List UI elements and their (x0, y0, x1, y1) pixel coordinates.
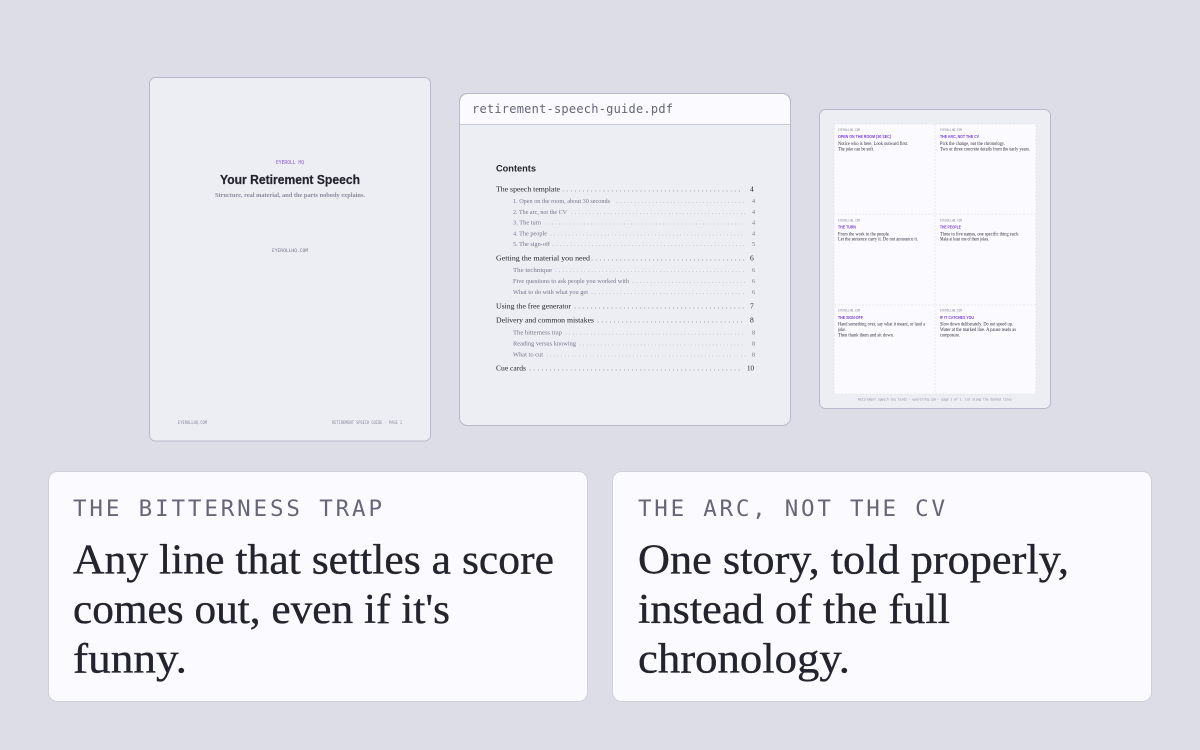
cue card: open on the room: The joke can be soft. (838, 148, 874, 152)
cue card: open on the room (838, 127, 908, 152)
quote text: chronology. (638, 636, 850, 682)
cue card: if it catches you: Slow down deliberately. Do not speed up. (940, 322, 1013, 328)
table of contents: Cue cards (496, 364, 526, 372)
panel: the bitterness trap quote (48, 472, 588, 702)
cue card: open on the room: OPEN ON THE ROOM (30 SEC) (838, 134, 892, 139)
cover website: EYEROLLHQ.COM (272, 248, 308, 254)
table of contents: The technique (513, 267, 552, 274)
cue card: the people: THE PEOPLE (940, 224, 961, 230)
table of contents: 4 (752, 198, 755, 205)
table of contents: 8 (752, 340, 755, 348)
cue cards footer note: Retirement Speech Cue Cards · eyerollhq.com · page 1 of 1. cut along the dashed lines (858, 398, 1012, 402)
cue card: the people (940, 218, 1019, 242)
quote text: Any line that settles a score (73, 538, 554, 584)
cue card: if it catches you: IF IT CATCHES YOU (940, 315, 974, 320)
cue card: the turn: From the work to the people. (838, 232, 890, 238)
table of contents: 1. Open on the room, about 30 seconds (513, 198, 611, 205)
cue card: the turn: THE TURN (838, 224, 856, 230)
table of contents: 2. The arc, not the CV (513, 209, 568, 216)
table of contents: Getting the material you need (496, 254, 590, 262)
quote label: THE BITTERNESS TRAP (73, 496, 382, 522)
quote text: instead of the full (638, 587, 950, 633)
table of contents: 6 (752, 278, 755, 285)
table of contents: 4 (752, 230, 755, 238)
quote text: funny. (73, 636, 187, 682)
cue card: the sign-off: joke. (837, 328, 846, 333)
cue card: the arc: EYEROLLHQ.COM (940, 127, 963, 132)
cue card: if it catches you: EYEROLLHQ.COM (940, 308, 963, 312)
table of contents (496, 184, 755, 372)
table of contents: 4 (752, 209, 755, 216)
panel: guide cover page (150, 78, 430, 441)
table of contents: 8 (750, 316, 754, 324)
cue card: the sign-off: Hand something over, say what it meant, or land a (838, 322, 926, 328)
table of contents: Delivery and common mistakes (496, 316, 594, 324)
cue card: the people: Three to five names, one specific thing each. (940, 232, 1019, 238)
table of contents: 4 (752, 220, 755, 226)
table of contents: 4 (750, 184, 754, 194)
table of contents: Using the free generator (496, 302, 572, 310)
cue card: the sign-off: EYEROLLHQ.COM (838, 308, 861, 312)
table of contents: 6 (750, 254, 754, 262)
cover subtitle: Structure, real material, and the parts nobody explains. (215, 192, 365, 199)
table of contents: 8 (752, 330, 755, 336)
cue card: the sign-off: THE SIGN-OFF (838, 315, 863, 320)
table of contents: What to cut (513, 352, 543, 358)
pdf file name: retirement-speech-guide.pdf (472, 102, 673, 116)
quote label: THE ARC, NOT THE CV (638, 496, 945, 522)
table of contents: 8 (752, 352, 755, 358)
cue card: if it catches you: Water at the marked line. A pause reads as (940, 328, 1016, 333)
table of contents: 6 (752, 267, 755, 274)
cover footer right: RETIREMENT SPEECH GUIDE · PAGE 1 (332, 420, 403, 425)
table of contents: What to do with what you get (513, 289, 588, 296)
cover brand label: EYEROLL HQ (276, 160, 304, 166)
table of contents: Five questions to ask people you worked with (513, 278, 630, 285)
cue card: the arc: Two or three concrete details from the early years. (940, 148, 1030, 152)
table of contents: 5 (752, 241, 755, 248)
cue card: the turn (838, 218, 918, 242)
table of contents: 4. The people (513, 230, 547, 238)
cue card: the people: Make at least one of them jokes. (940, 238, 989, 242)
quote text: One story, told properly, (638, 538, 1069, 584)
cover footer left: EYEROLLHQ.COM (178, 420, 208, 425)
quote text (638, 538, 1069, 682)
cue card: the turn: Let the sentence carry it. Do not announce it. (838, 238, 918, 242)
cue card: open on the room: Notice who is here. Look outward first. (838, 142, 908, 147)
table of contents: The speech template (496, 184, 561, 194)
cue card: the people: EYEROLLHQ.COM (940, 218, 963, 222)
cue card: if it catches you: composure. (940, 334, 960, 338)
quote text: comes out, even if it's (73, 587, 450, 633)
cue card: if it catches you (940, 308, 1016, 338)
panel: contents page in pdf viewer (460, 94, 790, 426)
table of contents: Reading versus knowing (513, 340, 576, 348)
table of contents: 3. The turn (513, 220, 541, 226)
cue card: the arc: THE ARC, NOT THE CV (940, 134, 979, 139)
cover title: Your Retirement Speech (220, 173, 360, 187)
cue card: open on the room: EYEROLLHQ.COM (838, 127, 861, 132)
panel: the arc quote (612, 472, 1152, 702)
table of contents: The bitterness trap (513, 330, 562, 336)
table of contents: 5. The sign-off (513, 241, 551, 248)
table of contents: 6 (752, 289, 755, 296)
contents heading: Contents (496, 164, 536, 174)
cue card: the arc (940, 127, 1030, 152)
panel: cue cards page (820, 110, 1050, 408)
cue card: the arc: Pick the change, not the chronology. (940, 142, 1005, 147)
table of contents: 10 (747, 364, 754, 372)
quote text (73, 538, 554, 682)
cue card: the sign-off (837, 308, 926, 338)
cue card: the turn: EYEROLLHQ.COM (838, 218, 861, 222)
table of contents: 7 (750, 302, 754, 310)
cue card: the sign-off: Then thank them and sit down. (838, 334, 894, 338)
